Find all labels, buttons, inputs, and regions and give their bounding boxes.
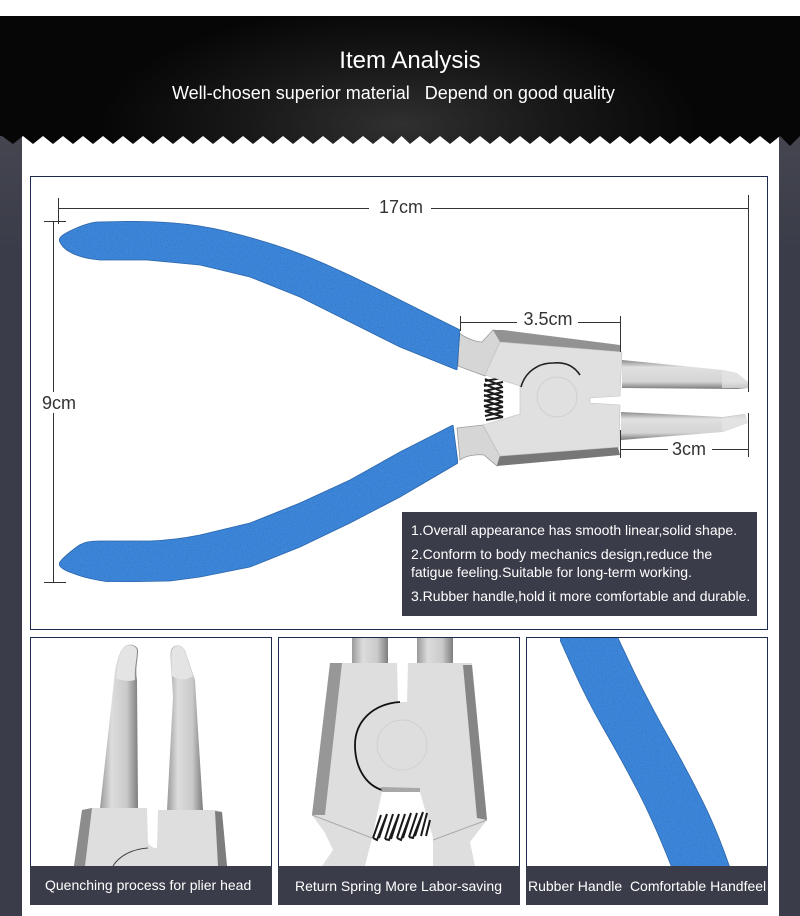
upper prong	[622, 360, 748, 389]
feature notes box: 2.Conform to body mechanics design,reduce the	[411, 546, 712, 562]
return spring	[484, 378, 503, 420]
panel: plier head detail	[30, 638, 272, 905]
dimension: 3cm: 3cm	[672, 439, 706, 459]
title: Item Analysis	[339, 47, 481, 74]
feature notes box	[402, 512, 757, 616]
pliers illustration	[59, 221, 748, 582]
jaw body	[483, 342, 622, 456]
lower jaw neck	[457, 425, 500, 466]
dimension: 17cm: 17cm	[379, 197, 423, 217]
panel: rubber handle detail	[526, 636, 768, 905]
main panel frame	[30, 176, 768, 630]
lower prong tip	[722, 414, 748, 432]
spring image	[312, 637, 487, 866]
handle image	[560, 636, 730, 868]
pivot circle	[537, 377, 577, 417]
lower prong	[621, 412, 748, 440]
plier head image	[74, 645, 227, 866]
upper jaw top edge	[493, 330, 622, 360]
lower blue handle	[59, 425, 458, 582]
upper jaw neck	[458, 330, 503, 376]
feature notes box: 1.Overall appearance has smooth linear,solid shape.	[411, 522, 737, 538]
dimension: 3cm	[620, 413, 748, 459]
dimension: 9cm	[42, 222, 76, 582]
dimension: 9cm: 9cm	[42, 393, 76, 413]
dimension: 17cm	[58, 195, 748, 392]
dimension: 3.5cm: 3.5cm	[523, 309, 573, 329]
panel: return spring detail	[278, 637, 520, 905]
pivot arc	[521, 363, 580, 387]
upper prong tip	[722, 371, 748, 388]
upper blue handle	[59, 221, 460, 370]
caption: Rubber Handle Comfortable Handfeel	[528, 878, 766, 894]
caption: Quenching process for plier head	[45, 877, 251, 893]
subtitle: Well-chosen superior material Depend on good quality	[172, 83, 615, 103]
header banner	[0, 16, 800, 146]
caption: Return Spring More Labor-saving	[295, 878, 502, 894]
feature notes box: fatigue feeling.Suitable for long-term working.	[411, 564, 692, 580]
feature notes box: 3.Rubber handle,hold it more comfortable and durable.	[411, 588, 750, 604]
lower jaw dark edge	[497, 447, 620, 466]
right side band	[779, 136, 800, 916]
left side band	[0, 136, 22, 916]
dimension: 3.5cm	[460, 309, 620, 352]
